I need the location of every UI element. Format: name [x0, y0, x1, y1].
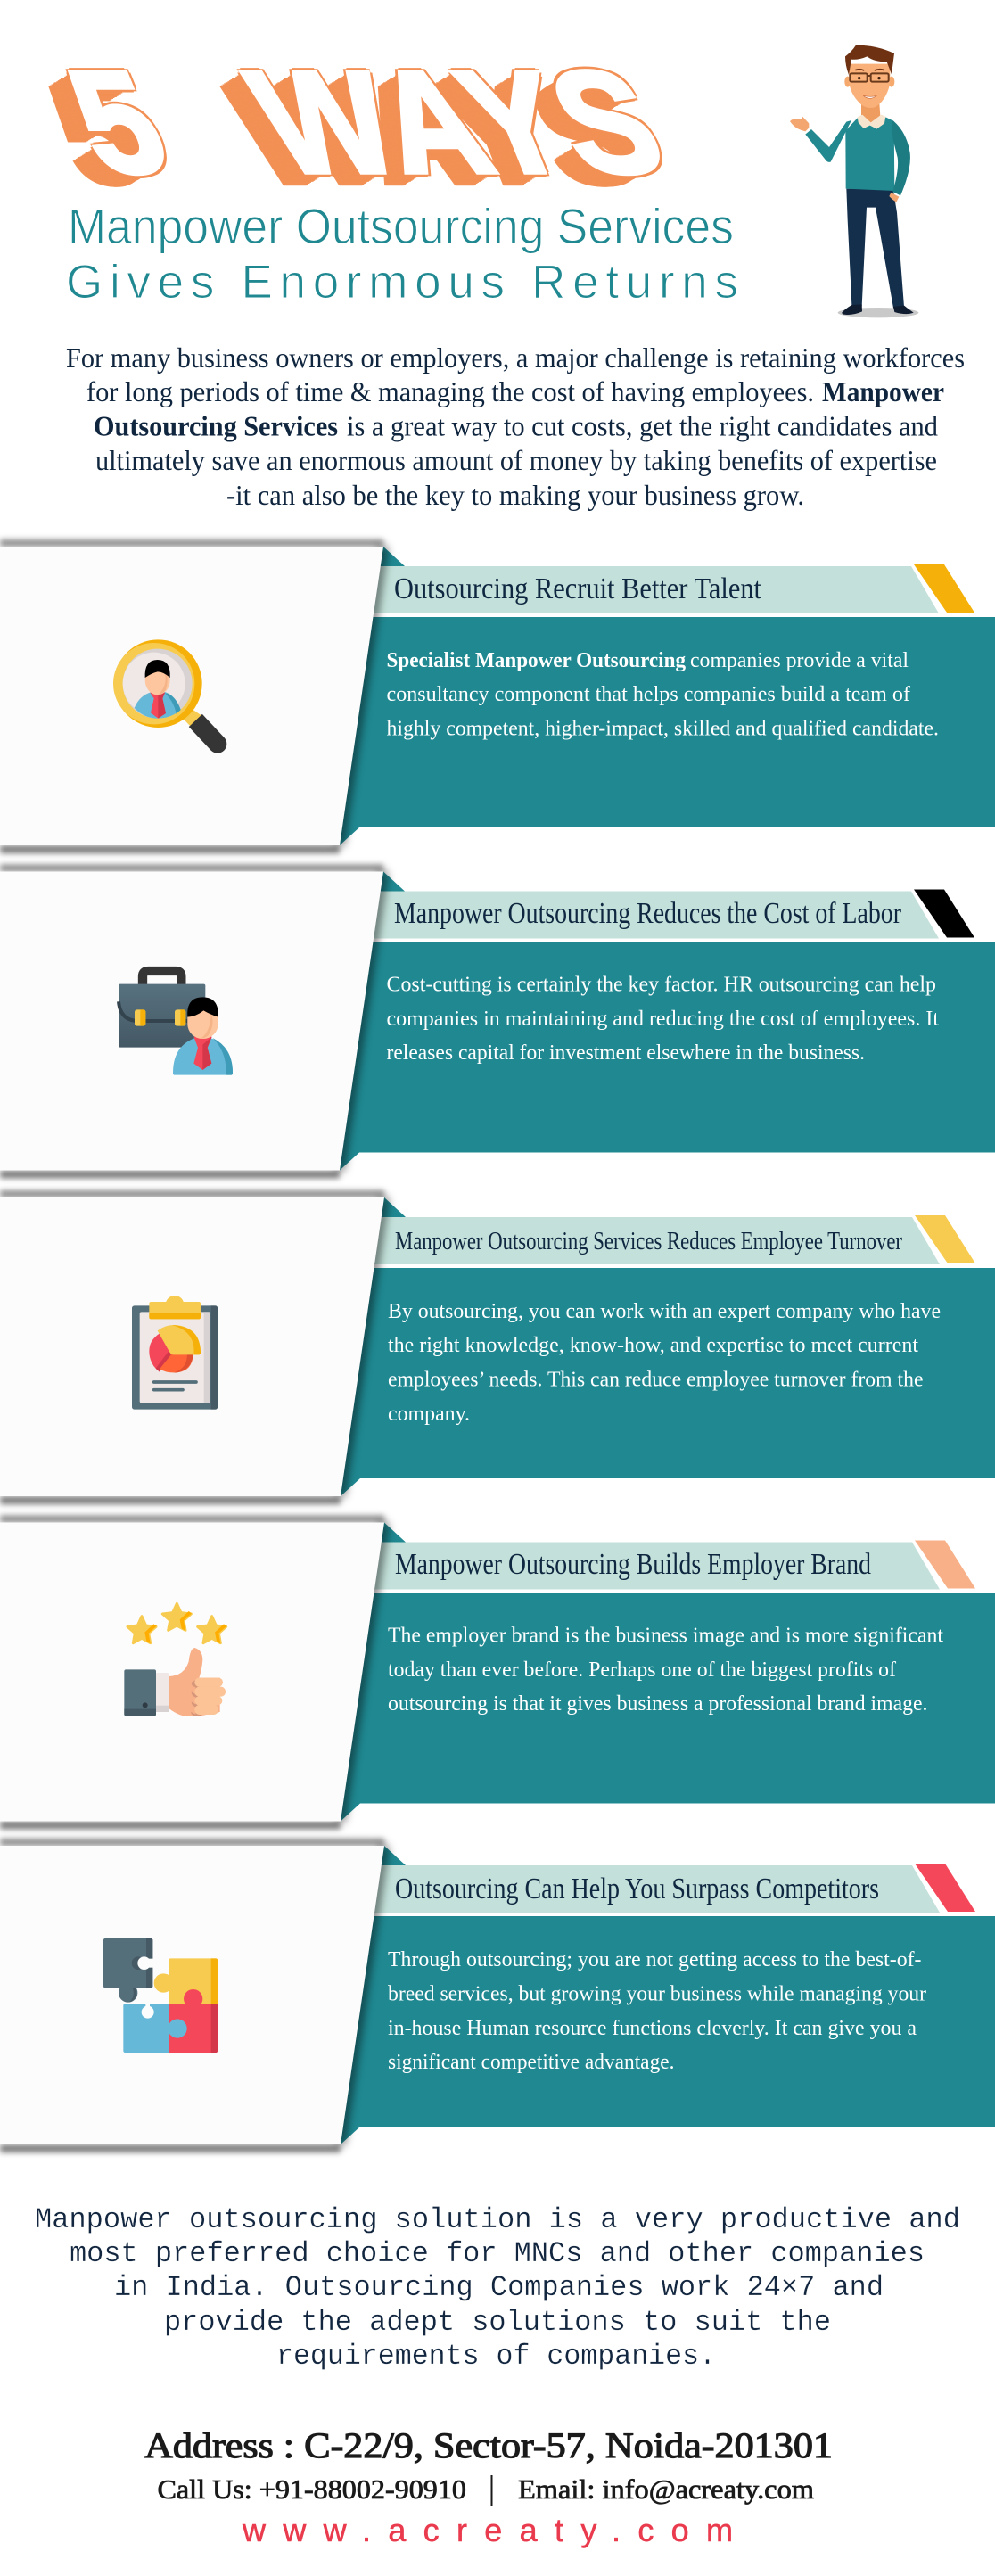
closing paragraph: provide the adept solutions to suit the: [164, 2306, 831, 2339]
body text 2: companies in maintaining and reducing the cost of employees. It: [387, 1008, 939, 1031]
body text 5: breed services, but growing your business while managing your: [388, 1983, 926, 2006]
intro paragraph: -it can also be the key to making your business grow.: [226, 479, 804, 511]
intro paragraph: for long periods of time & managing the cost of having employees.: [86, 375, 814, 407]
intro paragraph: Outsourcing Services: [94, 410, 338, 442]
closing paragraph: [35, 2203, 960, 2373]
icon: magnifier with person: [113, 639, 226, 753]
closing paragraph: most preferred choice for MNCs and other companies: [70, 2237, 925, 2270]
subtitle: [66, 198, 738, 309]
panel 2: reduces cost of labor: [0, 865, 995, 1179]
panel 1 ribbon and card: [0, 539, 995, 853]
website: www.acreaty.com: [242, 2512, 733, 2548]
panel 5: surpass competitors: [0, 1839, 995, 2152]
intro paragraph: ultimately save an enormous amount of money by taking benefits of expertise: [95, 444, 937, 476]
panel 3 ribbon and card: [0, 1190, 995, 1504]
panel 2 ribbon and card: [0, 865, 995, 1179]
body text 4: The employer brand is the business image and is more significant: [388, 1625, 943, 1648]
body text 1: [387, 649, 939, 740]
panel 5 ribbon and card: [0, 1839, 995, 2152]
body text 4: today than ever before. Perhaps one of the biggest profits of: [388, 1658, 896, 1682]
icon: briefcase with person: [119, 971, 233, 1075]
heading: outsourcing recruit better talent: Outsourcing Recruit Better Talent: [394, 572, 761, 605]
body text 2: Cost-cutting is certainly the key factor. HR outsourcing can help: [387, 974, 936, 997]
body text 3: company.: [388, 1403, 470, 1426]
body text 3: the right knowledge, know-how, and expertise to meet current: [388, 1334, 918, 1357]
contact details: Address : C-22/9, Sector-57, Noida-201301: [144, 2425, 833, 2465]
contact details: Email: info@acreaty.com: [518, 2473, 814, 2505]
body text 4: outsourcing is that it gives business a professional brand image.: [388, 1692, 927, 1716]
contact details: [144, 2425, 833, 2506]
body text 5: significant competitive advantage.: [388, 2051, 674, 2074]
body text 4: [388, 1625, 943, 1716]
closing paragraph: Manpower outsourcing solution is a very productive and: [35, 2203, 960, 2236]
icon: thumbs up with stars: [124, 1603, 226, 1716]
icon: jigsaw puzzle pieces: [103, 1938, 218, 2053]
contact details: Call Us: +91-88002-90910: [157, 2473, 466, 2505]
body text 5: Through outsourcing; you are not getting access to the best-of-: [388, 1948, 922, 1971]
intro paragraph: [66, 342, 965, 511]
body text 5: in-house Human resource functions cleverly. It can give you a: [388, 2017, 917, 2040]
body text 1: consultancy component that helps companies build a team of: [387, 683, 910, 706]
panel 3: reduces employee turnover: [0, 1190, 995, 1504]
body text 3: employees’ needs. This can reduce employee turnover from the: [388, 1368, 924, 1391]
body text 1: Specialist Manpower Outsourcing: [387, 649, 686, 672]
body text 2: releases capital for investment elsewhere in the business.: [387, 1041, 865, 1065]
illustration: man in teal sweater: [790, 45, 918, 317]
panel 4 ribbon and card: [0, 1516, 995, 1830]
body text 3: [388, 1300, 941, 1426]
panel 4: builds employer brand: [0, 1516, 995, 1830]
body text 5: [388, 1948, 926, 2074]
body text 1: companies provide a vital: [690, 649, 909, 672]
closing paragraph: requirements of companies.: [276, 2340, 716, 2373]
subtitle: Gives Enormous Returns: [66, 256, 738, 309]
intro paragraph: For many business owners or employers, a major challenge is retaining workforces: [66, 342, 965, 374]
panel 1: recruit better talent: [0, 539, 995, 853]
icon: clipboard with pie chart: [132, 1296, 218, 1410]
heading: surpass competitors: Outsourcing Can Help You Surpass Competitors: [395, 1872, 879, 1905]
subtitle: Manpower Outsourcing Services: [68, 198, 734, 254]
intro paragraph: Manpower: [822, 375, 944, 407]
title: 5 WAYS: WAYS: [229, 41, 687, 203]
body text 2: [387, 974, 939, 1065]
heading: builds employer brand: Manpower Outsourcing Builds Employer Brand: [395, 1548, 871, 1581]
closing paragraph: in India. Outsourcing Companies work 24×7 and: [114, 2271, 884, 2304]
title: 5 WAYS: 5: [48, 41, 190, 203]
body text 1: highly competent, higher-impact, skilled and qualified candidate.: [387, 717, 939, 740]
body text 3: By outsourcing, you can work with an expert company who have: [388, 1300, 941, 1323]
intro paragraph: is a great way to cut costs, get the right candidates and: [347, 410, 938, 442]
